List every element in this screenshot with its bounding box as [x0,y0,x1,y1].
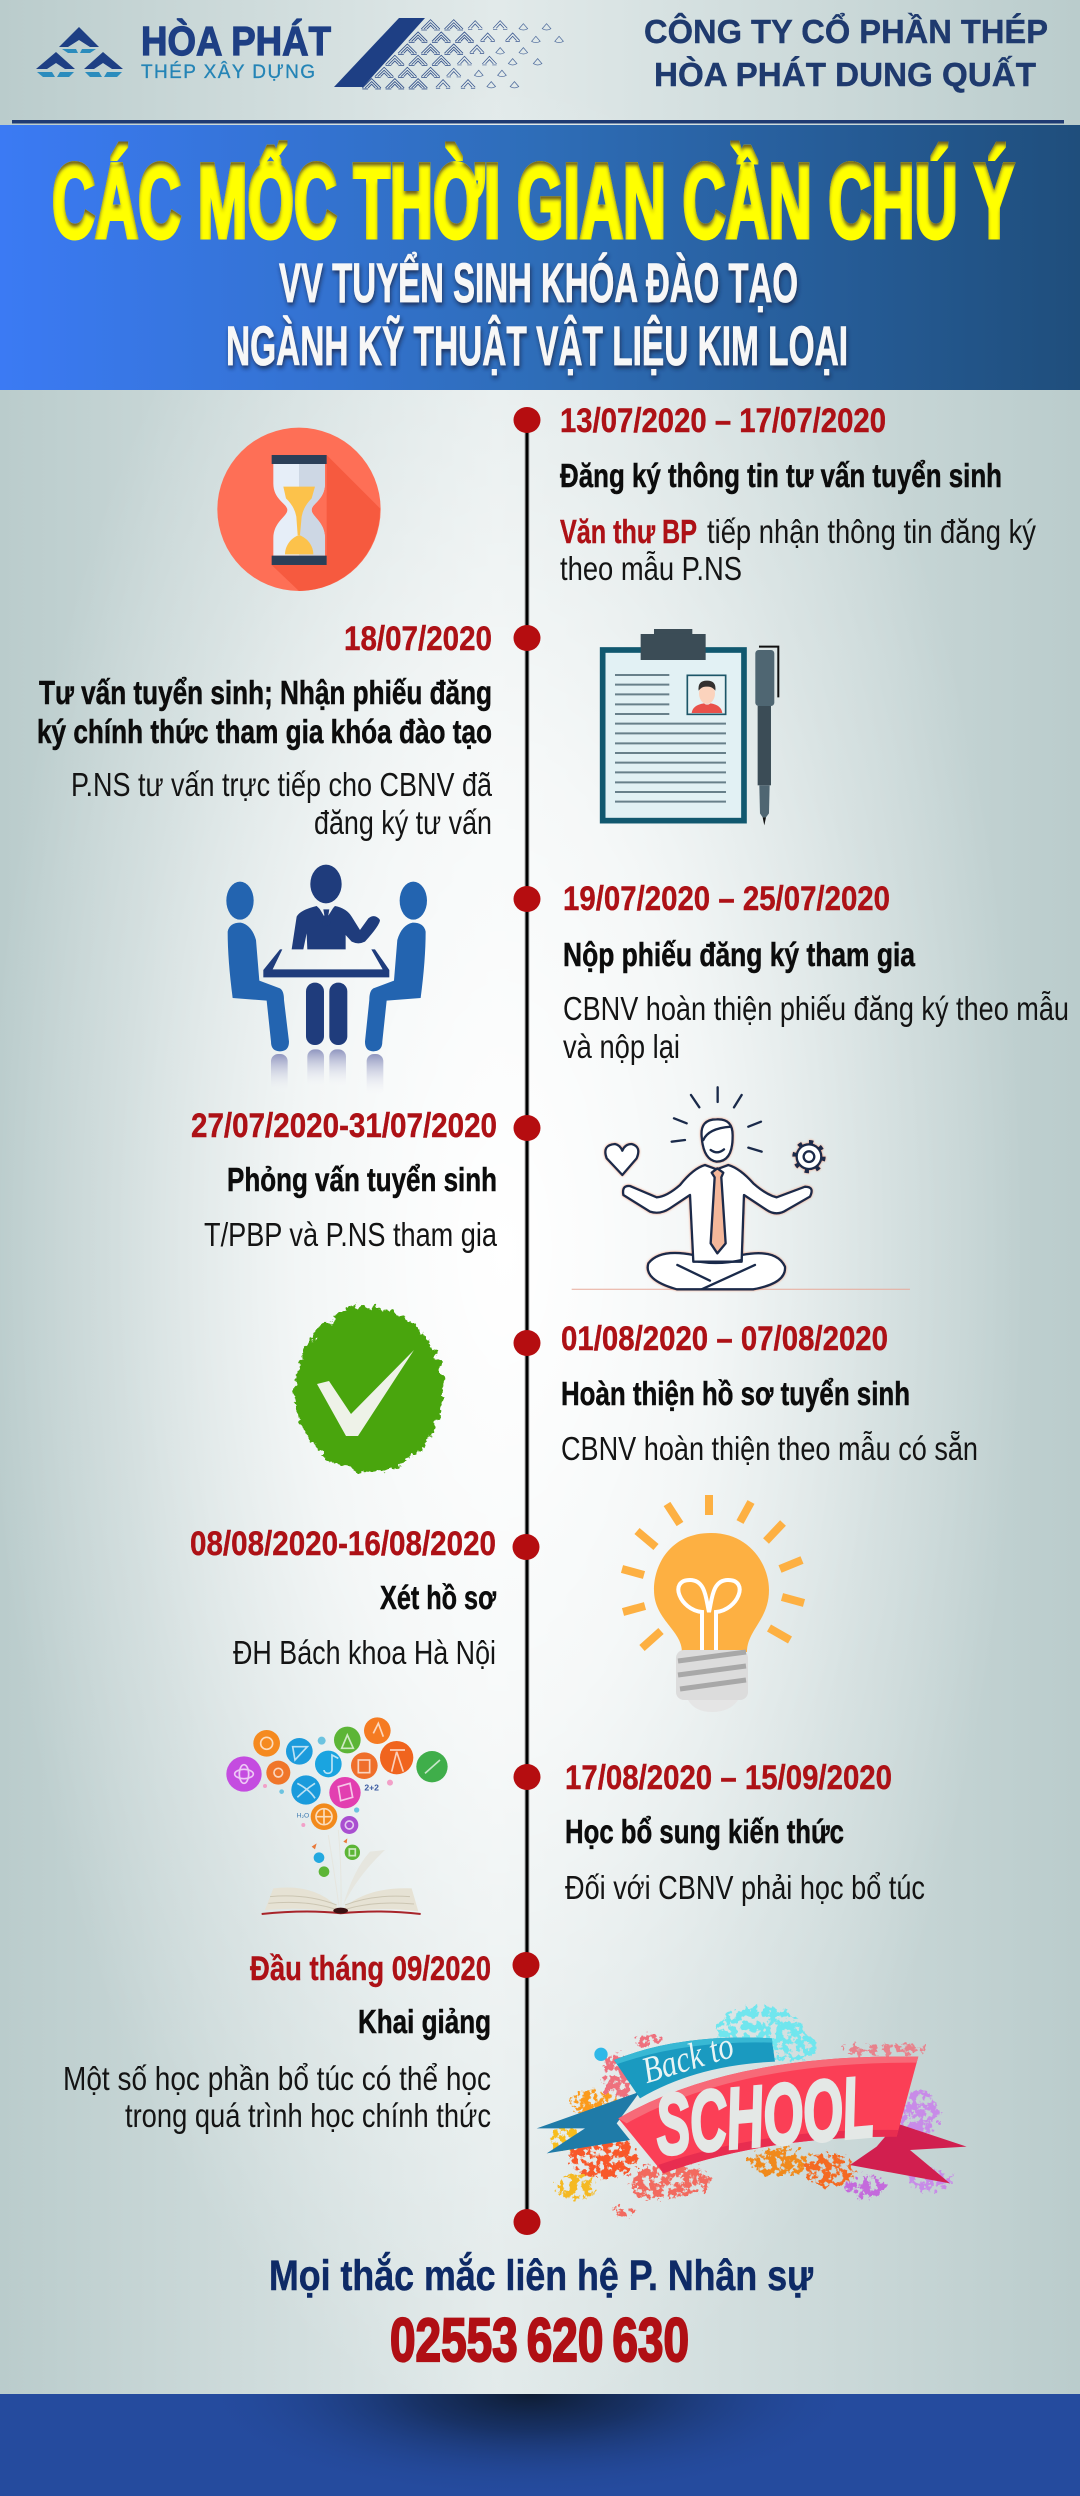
date: 27/07/2020-31/07/2020 [191,1107,497,1145]
body: theo mẫu P.NS [560,550,742,587]
body [63,2060,491,2134]
timeline item 6 [190,1525,496,1671]
body: CBNV hoàn thiện theo mẫu có sẵn [561,1430,978,1467]
timeline item 1 [560,402,1036,587]
icon: hourglass [217,428,381,591]
body: đăng ký tư vấn [314,804,492,841]
body: T/PBP và P.NS tham gia [204,1216,498,1253]
heading: Tư vấn tuyển sinh; Nhận phiếu đăng [39,674,492,711]
icon: meditating businessman [572,1087,910,1289]
body [71,766,493,841]
body: Văn thư BP [560,513,697,550]
icon: steel pattern [334,18,563,89]
body [560,513,1036,587]
school lettering: SCHOOL [652,2059,877,2174]
body [563,990,1069,1065]
date: 01/08/2020 – 07/08/2020 [561,1320,888,1358]
heading: ký chính thức tham gia khóa đào tạo [37,713,492,750]
logo tagline: THÉP XÂY DỰNG [141,61,315,83]
title banner [0,125,1080,390]
icon: back to school banner [537,2007,967,2216]
date: 08/08/2020-16/08/2020 [190,1525,496,1563]
icon: clipboard and pen [603,629,778,825]
heading: Nộp phiếu đăng ký tham gia [563,936,916,973]
timeline item 8 [63,1950,491,2134]
date: 18/07/2020 [344,620,492,658]
icon: book with science bubbles: 2+2 [364,1783,379,1793]
icon: meeting people [226,865,427,1097]
heading [37,674,492,750]
body: Đối với CBNV phải học bổ túc [565,1869,925,1906]
timeline item 3 [563,880,1069,1065]
footer band [0,2394,1080,2496]
body: Một số học phần bổ túc có thể học [63,2060,491,2097]
heading: Xét hồ sơ [380,1579,496,1616]
timeline item 4 [191,1107,498,1253]
company name [644,12,1048,93]
company name: CÔNG TY CỔ PHẦN THÉP [644,12,1048,50]
body: trong quá trình học chính thức [125,2097,491,2134]
timeline item 2 [37,620,493,841]
icon: green check badge [295,1302,443,1472]
date: 13/07/2020 – 17/07/2020 [560,402,886,440]
heading: Khai giảng [358,2003,491,2040]
timeline spine with dots [512,407,540,2235]
body: P.NS tư vấn trực tiếp cho CBNV đã [71,766,493,803]
header [12,12,1064,124]
timeline item 7 [565,1759,925,1906]
heading: Hoàn thiện hồ sơ tuyển sinh [561,1375,910,1412]
icon: book with science bubbles: H₂O [297,1812,309,1819]
icon: Hoa Phat logo mark [36,27,123,77]
icon: book with science bubbles [226,1717,448,1914]
heading: Phỏng vấn tuyển sinh [227,1161,497,1198]
timeline item 5 [561,1320,978,1467]
heading: Học bổ sung kiến thức [565,1813,844,1850]
logo wordmark: HÒA PHÁT [141,18,331,64]
company name: HÒA PHÁT DUNG QUẤT [654,56,1036,93]
contact line: Mọi thắc mắc liên hệ P. Nhân sự [269,2251,814,2300]
date: Đầu tháng 09/2020 [250,1950,491,1988]
icon: light bulb [622,1495,804,1712]
date: 17/08/2020 – 15/09/2020 [565,1759,892,1797]
back to lettering: Back to [637,2025,739,2092]
body: và nộp lại [563,1028,680,1065]
body: ĐH Bách khoa Hà Nội [233,1634,496,1671]
phone number: 02553 620 630 [390,2306,689,2374]
date: 19/07/2020 – 25/07/2020 [563,880,890,918]
